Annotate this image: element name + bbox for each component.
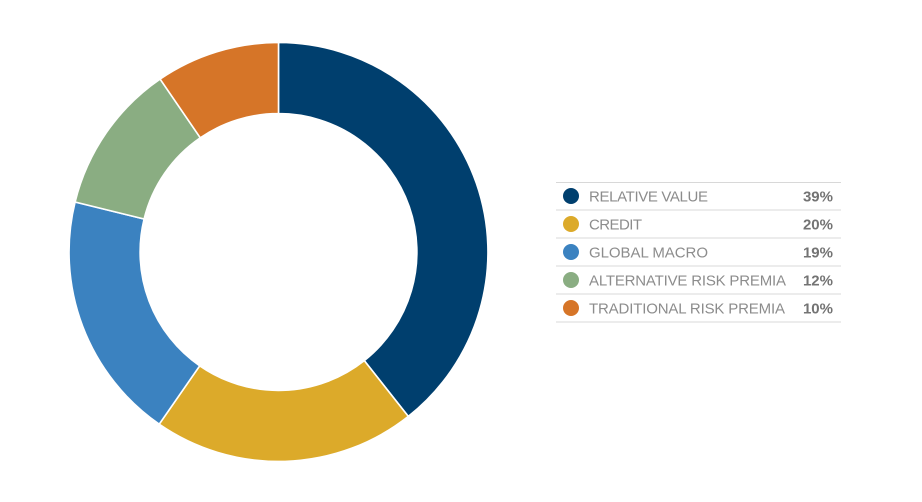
legend row: global macro: GLOBAL MACRO xyxy=(589,244,708,262)
legend row: traditional risk premia: TRADITIONAL RISK PREMIA xyxy=(589,300,785,318)
legend row: relative value: 39% xyxy=(803,188,833,206)
slice: global macro 19% xyxy=(69,202,200,424)
legend row: credit: 20% xyxy=(803,216,833,234)
legend row: relative value xyxy=(563,188,833,206)
legend row: credit xyxy=(563,216,833,234)
slice: alternative risk premia 12% xyxy=(75,79,200,219)
slice: relative value 39% xyxy=(278,42,488,416)
legend table xyxy=(556,182,841,322)
slice: credit 20% xyxy=(159,361,408,461)
legend row: traditional risk premia: 10% xyxy=(803,300,833,318)
legend row: relative value: RELATIVE VALUE xyxy=(589,188,708,206)
legend row: credit: CREDIT xyxy=(589,216,642,234)
legend row: alternative risk premia: ALTERNATIVE RISK PREMIA xyxy=(589,272,786,290)
legend row: global macro: 19% xyxy=(803,244,833,262)
donut chart xyxy=(69,42,488,461)
slice: traditional risk premia 10% xyxy=(160,42,278,138)
legend row: global macro xyxy=(563,244,833,262)
legend row: alternative risk premia: 12% xyxy=(803,272,833,290)
